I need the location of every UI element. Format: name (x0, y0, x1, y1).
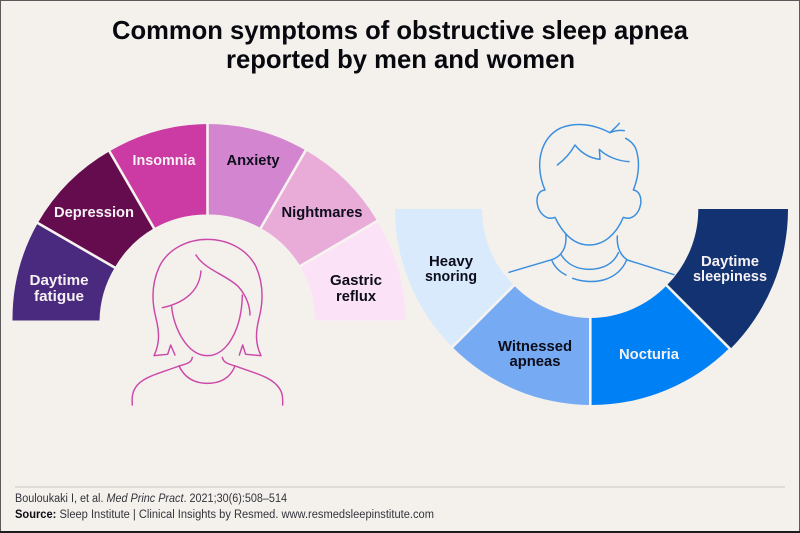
segment: Daytime sleepiness (667, 209, 788, 349)
segment: Gastric reflux: Gastric (330, 272, 382, 289)
segment: Depression (38, 151, 154, 268)
title: Common symptoms of obstructive sleep apnea (112, 15, 689, 45)
segment: Nocturia (590, 285, 730, 405)
footer rule (15, 486, 785, 488)
segment: Heavy snoring: snoring (425, 268, 477, 285)
title: reported by men and women (226, 44, 575, 74)
icon: man outline (509, 123, 674, 282)
segment: Gastric reflux (300, 221, 406, 320)
title (112, 15, 689, 74)
source line: Source: Sleep Institute | Clinical Insights by Resmed. www.resmedsleepinstitute.com (15, 509, 434, 521)
segment: Daytime fatigue: fatigue (34, 288, 84, 305)
segment: Nightmares: Nightmares (282, 204, 362, 221)
segment: Anxiety (208, 124, 306, 228)
chart: women's symptoms semicircle (12, 122, 406, 320)
segment: Daytime fatigue (12, 223, 115, 320)
segment: Anxiety: Anxiety (226, 152, 280, 169)
segment: Witnessed apneas: apneas (510, 353, 560, 370)
segment: Daytime sleepiness: sleepiness (693, 268, 767, 285)
chart: men's symptoms semicircle (395, 209, 788, 407)
segment: Witnessed apneas (452, 285, 590, 405)
segment: Depression: Depression (54, 204, 134, 221)
segment: Heavy snoring: Heavy (429, 253, 474, 270)
segment: Insomnia (110, 124, 208, 228)
segment: Gastric reflux: reflux (336, 288, 377, 305)
icon: woman outline (132, 239, 283, 405)
segment: Daytime sleepiness: Daytime (701, 253, 759, 270)
segment: Daytime fatigue: Daytime (30, 272, 88, 289)
segment: Nocturia: Nocturia (619, 346, 680, 363)
segment: Heavy snoring (395, 209, 514, 347)
segment: Nightmares (261, 150, 377, 266)
citation: Bouloukaki I, et al. Med Princ Pract. 2021;30(6):508–514 (15, 493, 288, 505)
segment: Insomnia: Insomnia (132, 152, 196, 169)
segment: Witnessed apneas: Witnessed (498, 338, 572, 355)
